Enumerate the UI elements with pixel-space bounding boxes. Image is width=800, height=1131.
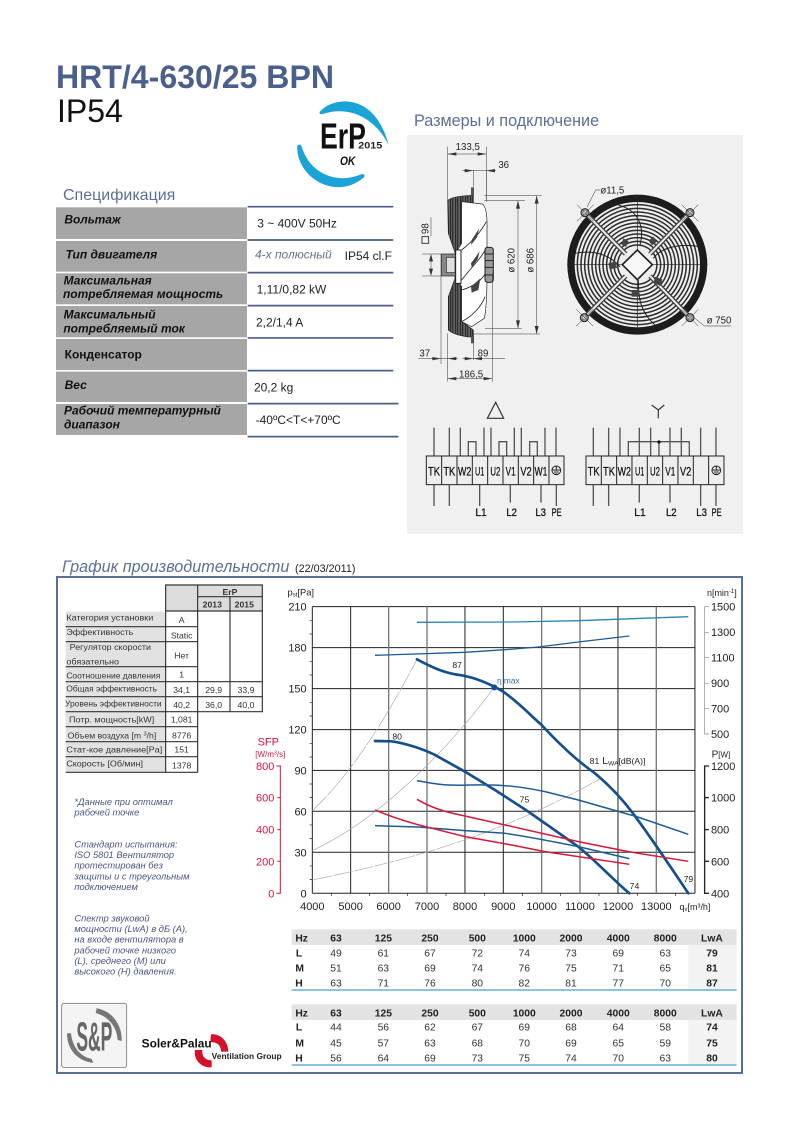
diagram: delta wiring terminals: PE — [552, 507, 562, 519]
diagram: star wiring terminals: PE — [712, 507, 722, 519]
table: sound power lower: 73 — [472, 1053, 483, 1064]
text block: notes: защиты и с треугольным — [73, 871, 190, 881]
diagram: fan front view with guard: ø 750 — [707, 315, 731, 326]
row: max power: Максимальная — [64, 273, 152, 287]
table: sound power upper: 69 — [424, 964, 436, 975]
table: sound power upper: 500 — [469, 934, 486, 945]
axis: power: 600 — [711, 856, 729, 868]
text block: notes: Стандарт испытания: — [74, 839, 178, 849]
diagram: star wiring terminals: V2 — [680, 465, 691, 478]
table: sound power upper: 75 — [565, 964, 577, 975]
table: sound power lower: 250 — [421, 1009, 439, 1020]
title: IP54 — [57, 93, 123, 129]
diagram: fan front view with guard: ø11,5 — [600, 185, 624, 196]
table: sound power lower: 69 — [565, 1038, 577, 1049]
curve labels: 80 — [392, 731, 402, 741]
diagram: delta wiring terminals: W2 — [458, 465, 471, 478]
table: sound power upper: 79 — [706, 949, 718, 960]
table: sound power upper: 71 — [378, 979, 389, 990]
chart grid — [310, 607, 695, 896]
table: sound power lower: 80 — [706, 1053, 718, 1064]
speed curves — [375, 617, 688, 655]
diagram: star wiring terminals: TK — [603, 465, 615, 478]
icon: ErP 2015 OK badge: 2015 — [358, 140, 382, 150]
axis: pressure: p — [288, 587, 293, 597]
row: temperature range: диапазон — [64, 417, 120, 431]
axis: flow: 5000 — [338, 901, 363, 913]
heading: performance chart: График производительности — [62, 558, 289, 576]
axis: flow: 8000 — [453, 901, 477, 913]
table: sound power lower — [292, 1004, 737, 1065]
diagram: delta wiring terminals: U1 — [475, 465, 484, 478]
axis: flow — [300, 901, 710, 913]
table: sound power upper: 87 — [706, 979, 718, 990]
axis: flow: 9000 — [491, 901, 516, 913]
text block: notes: подключением — [74, 882, 138, 892]
table: sound power upper: 250 — [421, 934, 439, 945]
axis: flow: 13000 — [641, 901, 672, 913]
axis: SFP: 3 — [274, 750, 277, 756]
axis: SFP: 200 — [256, 856, 274, 868]
table: sound power upper: 4000 — [607, 934, 630, 945]
axis: power: 800 — [711, 825, 729, 837]
table: sound power lower: 4000 — [607, 1009, 630, 1020]
table: sound power upper: 63 — [330, 934, 342, 945]
table: sound power lower: 56 — [378, 1023, 389, 1034]
axis: flow: 4000 — [300, 901, 325, 913]
table: ErP data: 1378 — [172, 761, 191, 771]
table: ErP data — [65, 585, 262, 772]
table: sound power upper: 65 — [660, 964, 671, 975]
curve labels — [392, 660, 693, 891]
diagram: delta wiring terminals: W1 — [535, 465, 547, 478]
table: ErP data: 1 — [179, 670, 184, 680]
axis: pressure: st — [293, 592, 298, 598]
system curves (dashed) — [312, 659, 600, 880]
table: sound power lower: 75 — [706, 1038, 718, 1049]
diagram: delta wiring terminals: V2 — [520, 465, 532, 478]
diagram: delta wiring terminals: L2 — [506, 507, 517, 519]
SFP curves — [375, 799, 688, 864]
axis: speed: 700 — [711, 704, 729, 716]
axis: SFP: /s] — [277, 750, 285, 759]
table: sound power upper: 82 — [519, 979, 530, 990]
title — [56, 59, 334, 129]
table: ErP data: 34,1 — [173, 685, 190, 695]
text block: notes: *Данные при оптимал — [74, 797, 173, 807]
axis: pressure: 120 — [288, 725, 307, 737]
table: ErP data: Скорость [Об/мин] — [66, 759, 143, 769]
table: sound power lower: 56 — [330, 1053, 342, 1064]
axis: pressure: 90 — [294, 766, 307, 778]
text block: notes: Спектр звуковой — [74, 913, 150, 923]
diagram: delta wiring terminals: TK — [443, 465, 456, 478]
diagram: star wiring terminals: L3 — [696, 507, 707, 519]
row: max current: Максимальный — [64, 308, 156, 322]
heading: performance chart: (22/03/2011) — [295, 563, 355, 575]
diagram: star wiring terminals: V1 — [665, 465, 675, 478]
axis: flow: q — [679, 902, 684, 912]
table: sound power lower: 8000 — [654, 1009, 677, 1020]
row: max power: 1,11/0,82 kW — [257, 283, 327, 297]
curve labels: 81 — [590, 756, 599, 766]
table: sound power lower: 68 — [565, 1023, 577, 1034]
axis: pressure: 60 — [294, 806, 307, 818]
table: sound power lower: 65 — [613, 1038, 624, 1049]
table: sound power lower: 1000 — [513, 1009, 536, 1020]
table: sound power lower: 70 — [519, 1038, 530, 1049]
row: max current: потребляемый ток — [63, 321, 186, 335]
text block: notes: высокого (H) давления. — [74, 967, 177, 977]
pressure curves — [375, 659, 688, 893]
diagram: star wiring terminals: U1 — [635, 465, 644, 478]
diagram: fan side view with dimensions — [418, 142, 542, 382]
table: sound power upper: 81 — [706, 964, 718, 975]
row: max current — [56, 306, 303, 337]
table: sound power lower: 45 — [330, 1038, 342, 1049]
axis: power: P[W] — [712, 749, 730, 760]
table: sound power lower: 74 — [706, 1023, 718, 1034]
table: sound power lower: M — [295, 1038, 304, 1049]
table: sound power lower: L — [296, 1023, 302, 1034]
table: sound power lower: 500 — [469, 1009, 486, 1020]
table: ErP data: Категория установки — [66, 612, 153, 622]
table: sound power upper: 71 — [613, 964, 624, 975]
table: ErP data: Регулятор скорости — [70, 642, 151, 652]
diagram: fan side view with dimensions: 98 — [420, 223, 431, 234]
axis: speed: ] — [734, 588, 737, 598]
table: sound power lower: 75 — [519, 1053, 530, 1064]
max efficiency point: η max — [497, 675, 520, 685]
table: sound power upper: 76 — [519, 964, 530, 975]
axis: pressure: 30 — [294, 847, 307, 859]
axis: flow: v — [684, 907, 687, 913]
table: sound power lower: 70 — [613, 1053, 624, 1064]
table: sound power lower: 69 — [424, 1053, 436, 1064]
row: motor type: IP54 cl.F — [345, 249, 392, 263]
max efficiency point — [491, 675, 520, 690]
text block: notes: протестирован без — [74, 861, 164, 871]
table: sound power upper: 63 — [378, 964, 389, 975]
text block: notes — [73, 797, 190, 977]
table: sound power upper: LwA — [701, 934, 723, 945]
row: temperature range: Рабочий температурный — [64, 404, 222, 418]
row: voltage: Вольтаж — [64, 212, 122, 226]
diagram: star wiring terminals — [586, 405, 724, 519]
table: sound power upper — [292, 929, 737, 990]
table: ErP data: Потр. мощность[kW] — [69, 714, 154, 724]
table: sound power lower: 64 — [613, 1023, 624, 1034]
table: sound power upper: 51 — [330, 964, 342, 975]
heading: dimensions and connection: Размеры и подключение — [414, 112, 599, 130]
axis: pressure: 180 — [288, 643, 307, 655]
table: sound power upper: 63 — [660, 949, 671, 960]
table: sound power lower: 67 — [472, 1023, 483, 1034]
axis: speed: 1500 — [711, 602, 735, 614]
diagram: delta wiring terminals: TK — [428, 465, 440, 478]
axis: power: 1200 — [711, 761, 735, 773]
table: sound power lower: 63 — [424, 1038, 436, 1049]
logo: S&P — [62, 1003, 127, 1068]
logo: Soler & Palau: Soler&Palau — [142, 1036, 212, 1050]
axis: flow: 7000 — [415, 901, 439, 913]
curve labels: 75 — [520, 795, 529, 805]
diagram: fan side view with dimensions: 186,5 — [459, 369, 483, 380]
row: max power: потребляемая мощность — [63, 287, 223, 301]
table: sound power upper: 8000 — [654, 934, 677, 945]
icon: ErP 2015 OK badge — [297, 101, 389, 187]
table: sound power upper: 81 — [565, 979, 577, 990]
table: sound power upper: 74 — [472, 964, 483, 975]
axis: SFP: 0 — [268, 888, 274, 900]
diagram: fan side view with dimensions: 133,5 — [456, 142, 480, 153]
table: ErP data: 2013 — [203, 600, 222, 610]
curve labels: WA — [608, 760, 619, 767]
diagram: star wiring terminals: L2 — [666, 507, 677, 519]
table: sound power upper: 2000 — [559, 934, 583, 945]
table: sound power upper: 74 — [519, 949, 530, 960]
text block: notes: ISO 5801 Вентилятор — [74, 850, 174, 860]
table: sound power upper: 76 — [424, 979, 436, 990]
table: sound power upper: 61 — [378, 949, 389, 960]
axis: SFP: 600 — [256, 793, 274, 805]
table: ErP data: обязательно — [66, 656, 119, 666]
table: sound power lower: Hz — [295, 1009, 308, 1020]
curve labels: 87 — [452, 660, 462, 670]
table: sound power upper: 63 — [330, 979, 342, 990]
diagram: fan side view with dimensions: ø 620 — [506, 248, 517, 273]
table: sound power upper: 69 — [613, 949, 624, 960]
table: ErP data: A — [179, 615, 185, 625]
table: ErP data: Нет — [174, 650, 189, 660]
text block: notes: (L), среднего (M) или — [74, 956, 166, 966]
table: ErP data: 2015 — [235, 600, 254, 610]
diagram: delta wiring terminals: L3 — [535, 507, 546, 519]
diagram: delta wiring terminals: V1 — [506, 465, 516, 478]
table: ErP data: /h] — [147, 730, 156, 740]
table: sound power upper: Hz — [295, 934, 308, 945]
table: ErP data: 40,2 — [173, 700, 190, 710]
row: weight: 20,2 kg — [254, 380, 293, 394]
row: max current: 2,2/1,4 A — [256, 315, 303, 329]
axis: pressure — [288, 587, 314, 900]
table: ErP data: 29,9 — [205, 685, 222, 695]
table: sound power upper: 72 — [472, 949, 483, 960]
row: voltage — [56, 207, 337, 239]
table: sound power upper: 77 — [613, 979, 624, 990]
curve labels: 74 — [630, 881, 639, 891]
table: sound power lower: 74 — [565, 1053, 577, 1064]
diagram: star wiring terminals: L1 — [634, 507, 646, 519]
axis: SFP: 400 — [256, 825, 274, 837]
diagram: delta wiring terminals: U2 — [490, 465, 500, 478]
row: motor type: 4-х полюсный — [255, 247, 332, 261]
icon: ErP 2015 OK badge: ErP — [320, 115, 366, 156]
row: weight: Вес — [65, 378, 87, 392]
axis: speed: -1 — [729, 589, 735, 595]
axis: speed: 1300 — [711, 627, 735, 639]
table: ErP data: ErP — [223, 587, 238, 597]
text block: notes: мощности (LwA) в дБ (A), — [74, 924, 188, 934]
table: sound power upper: 49 — [330, 949, 342, 960]
diagram: star wiring terminals: TK — [588, 465, 600, 478]
row: motor type: Тип двигателя — [66, 248, 157, 262]
title: HRT/4-630/25 BPN — [56, 59, 334, 95]
table: sound power lower: 44 — [330, 1023, 342, 1034]
text block: notes: рабочей точке — [73, 808, 139, 818]
table: sound power lower: LwA — [701, 1009, 723, 1020]
curve labels: L — [602, 756, 608, 767]
table: sound power lower: 63 — [330, 1009, 342, 1020]
table: sound power upper: 1000 — [513, 934, 536, 945]
heading: specification: Спецификация — [63, 187, 175, 204]
table: sound power upper: 73 — [565, 949, 577, 960]
curve labels: [dB(A)] — [619, 756, 645, 766]
table: ErP data: Соотношение давления — [66, 670, 161, 680]
table: sound power lower: 57 — [378, 1038, 389, 1049]
axis: power: 400 — [711, 888, 729, 900]
axis: SFP: 800 — [256, 761, 274, 773]
table: sound power lower: 125 — [375, 1009, 392, 1020]
row: capacitor: Конденсатор — [65, 347, 142, 361]
table: ErP data: Стат-кое давление[Pa] — [66, 745, 162, 755]
table: sound power lower: 59 — [660, 1038, 671, 1049]
axis: flow: 12000 — [603, 901, 633, 913]
diagram: fan front view with guard — [567, 185, 731, 334]
row: capacitor — [56, 339, 247, 370]
table: sound power lower: 69 — [519, 1023, 530, 1034]
table: ErP data: Объем воздуха [m — [68, 730, 141, 740]
diagram: delta wiring terminals: L1 — [475, 507, 487, 519]
axis: pressure: 210 — [288, 602, 307, 614]
icon: ErP 2015 OK badge: OK — [340, 154, 356, 168]
power curves — [375, 781, 688, 859]
table: ErP data: 151 — [174, 745, 189, 755]
axis: SFP: [W/m — [255, 750, 274, 759]
table: ErP data: 40,0 — [238, 700, 255, 710]
table: ErP data: 3 — [144, 732, 147, 738]
row: temperature range: -40ºC<T<+70ºC — [256, 413, 341, 427]
table: sound power upper: 125 — [375, 934, 392, 945]
logo: S&P: S&P — [76, 1014, 112, 1060]
table: sound power lower: 2000 — [559, 1009, 583, 1020]
panel: specification table — [56, 207, 398, 437]
logo: Soler & Palau — [142, 1034, 282, 1067]
table: ErP data: 33,9 — [238, 685, 255, 695]
axis: flow: 6000 — [376, 901, 401, 913]
row: weight — [56, 372, 293, 402]
diagram: delta wiring terminals — [426, 402, 564, 519]
axis: speed: 500 — [711, 729, 729, 741]
diagram: fan side view with dimensions: 89 — [478, 349, 488, 360]
diagram: star wiring terminals: U2 — [650, 465, 660, 478]
row: voltage: 3 ~ 400V 50Hz — [257, 216, 337, 230]
axis: power — [705, 749, 735, 900]
table: ErP data: Уровень эффективности — [65, 699, 162, 709]
panel: performance frame — [57, 577, 742, 1073]
text block: notes: на входе вентилятора в — [74, 935, 184, 945]
row: temperature range — [56, 404, 341, 435]
axis: speed: 1100 — [711, 653, 735, 665]
table: sound power upper: 70 — [660, 979, 671, 990]
row: max power — [56, 273, 327, 304]
table: sound power upper: 67 — [424, 949, 436, 960]
axis: SFP — [255, 737, 285, 900]
logo: Soler & Palau: Ventilation Group — [212, 1051, 282, 1061]
curve labels: 79 — [684, 874, 693, 884]
diagram: fan side view with dimensions: ø 686 — [526, 248, 537, 273]
table: sound power lower: 58 — [660, 1023, 671, 1034]
table: ErP data: Static — [171, 630, 193, 640]
axis: speed — [705, 588, 737, 741]
axis: pressure: 0 — [301, 888, 307, 900]
axis: power: 1000 — [711, 793, 735, 805]
table: sound power upper: L — [296, 949, 302, 960]
diagram: fan side view with dimensions: 36 — [498, 160, 509, 171]
axis: flow: [m³/h] — [687, 902, 710, 912]
table: ErP data: 1,081 — [171, 715, 193, 725]
axis: flow: 11000 — [565, 901, 595, 913]
axis: SFP: SFP — [258, 737, 279, 749]
panel: dimensions background — [407, 135, 743, 534]
table: sound power lower: 62 — [424, 1023, 436, 1034]
table: sound power upper: M — [295, 964, 304, 975]
table: ErP data: Общая эффективность — [66, 684, 157, 694]
table: ErP data: Эффективность — [66, 627, 134, 637]
text block: notes: рабочей точке низкого — [73, 945, 176, 955]
axis: pressure: [Pa] — [297, 587, 314, 597]
table: sound power upper: H — [295, 979, 303, 990]
table: ErP data: 36,0 — [205, 700, 222, 710]
chart: performance curves — [255, 587, 737, 913]
table: sound power lower: 63 — [660, 1053, 671, 1064]
axis: pressure: 150 — [288, 684, 307, 696]
table: ErP data: 8776 — [172, 730, 191, 740]
diagram: fan side view with dimensions: 37 — [419, 349, 430, 360]
table: sound power upper: 80 — [472, 979, 483, 990]
axis: speed: n[min — [707, 588, 729, 598]
table: sound power lower: 68 — [472, 1038, 483, 1049]
table: sound power lower: H — [295, 1053, 303, 1064]
axis: speed: 900 — [711, 678, 729, 690]
table: sound power lower: 64 — [378, 1053, 389, 1064]
axis: flow: 10000 — [526, 901, 557, 913]
diagram: star wiring terminals: W2 — [618, 465, 631, 478]
row: motor type — [56, 241, 392, 272]
